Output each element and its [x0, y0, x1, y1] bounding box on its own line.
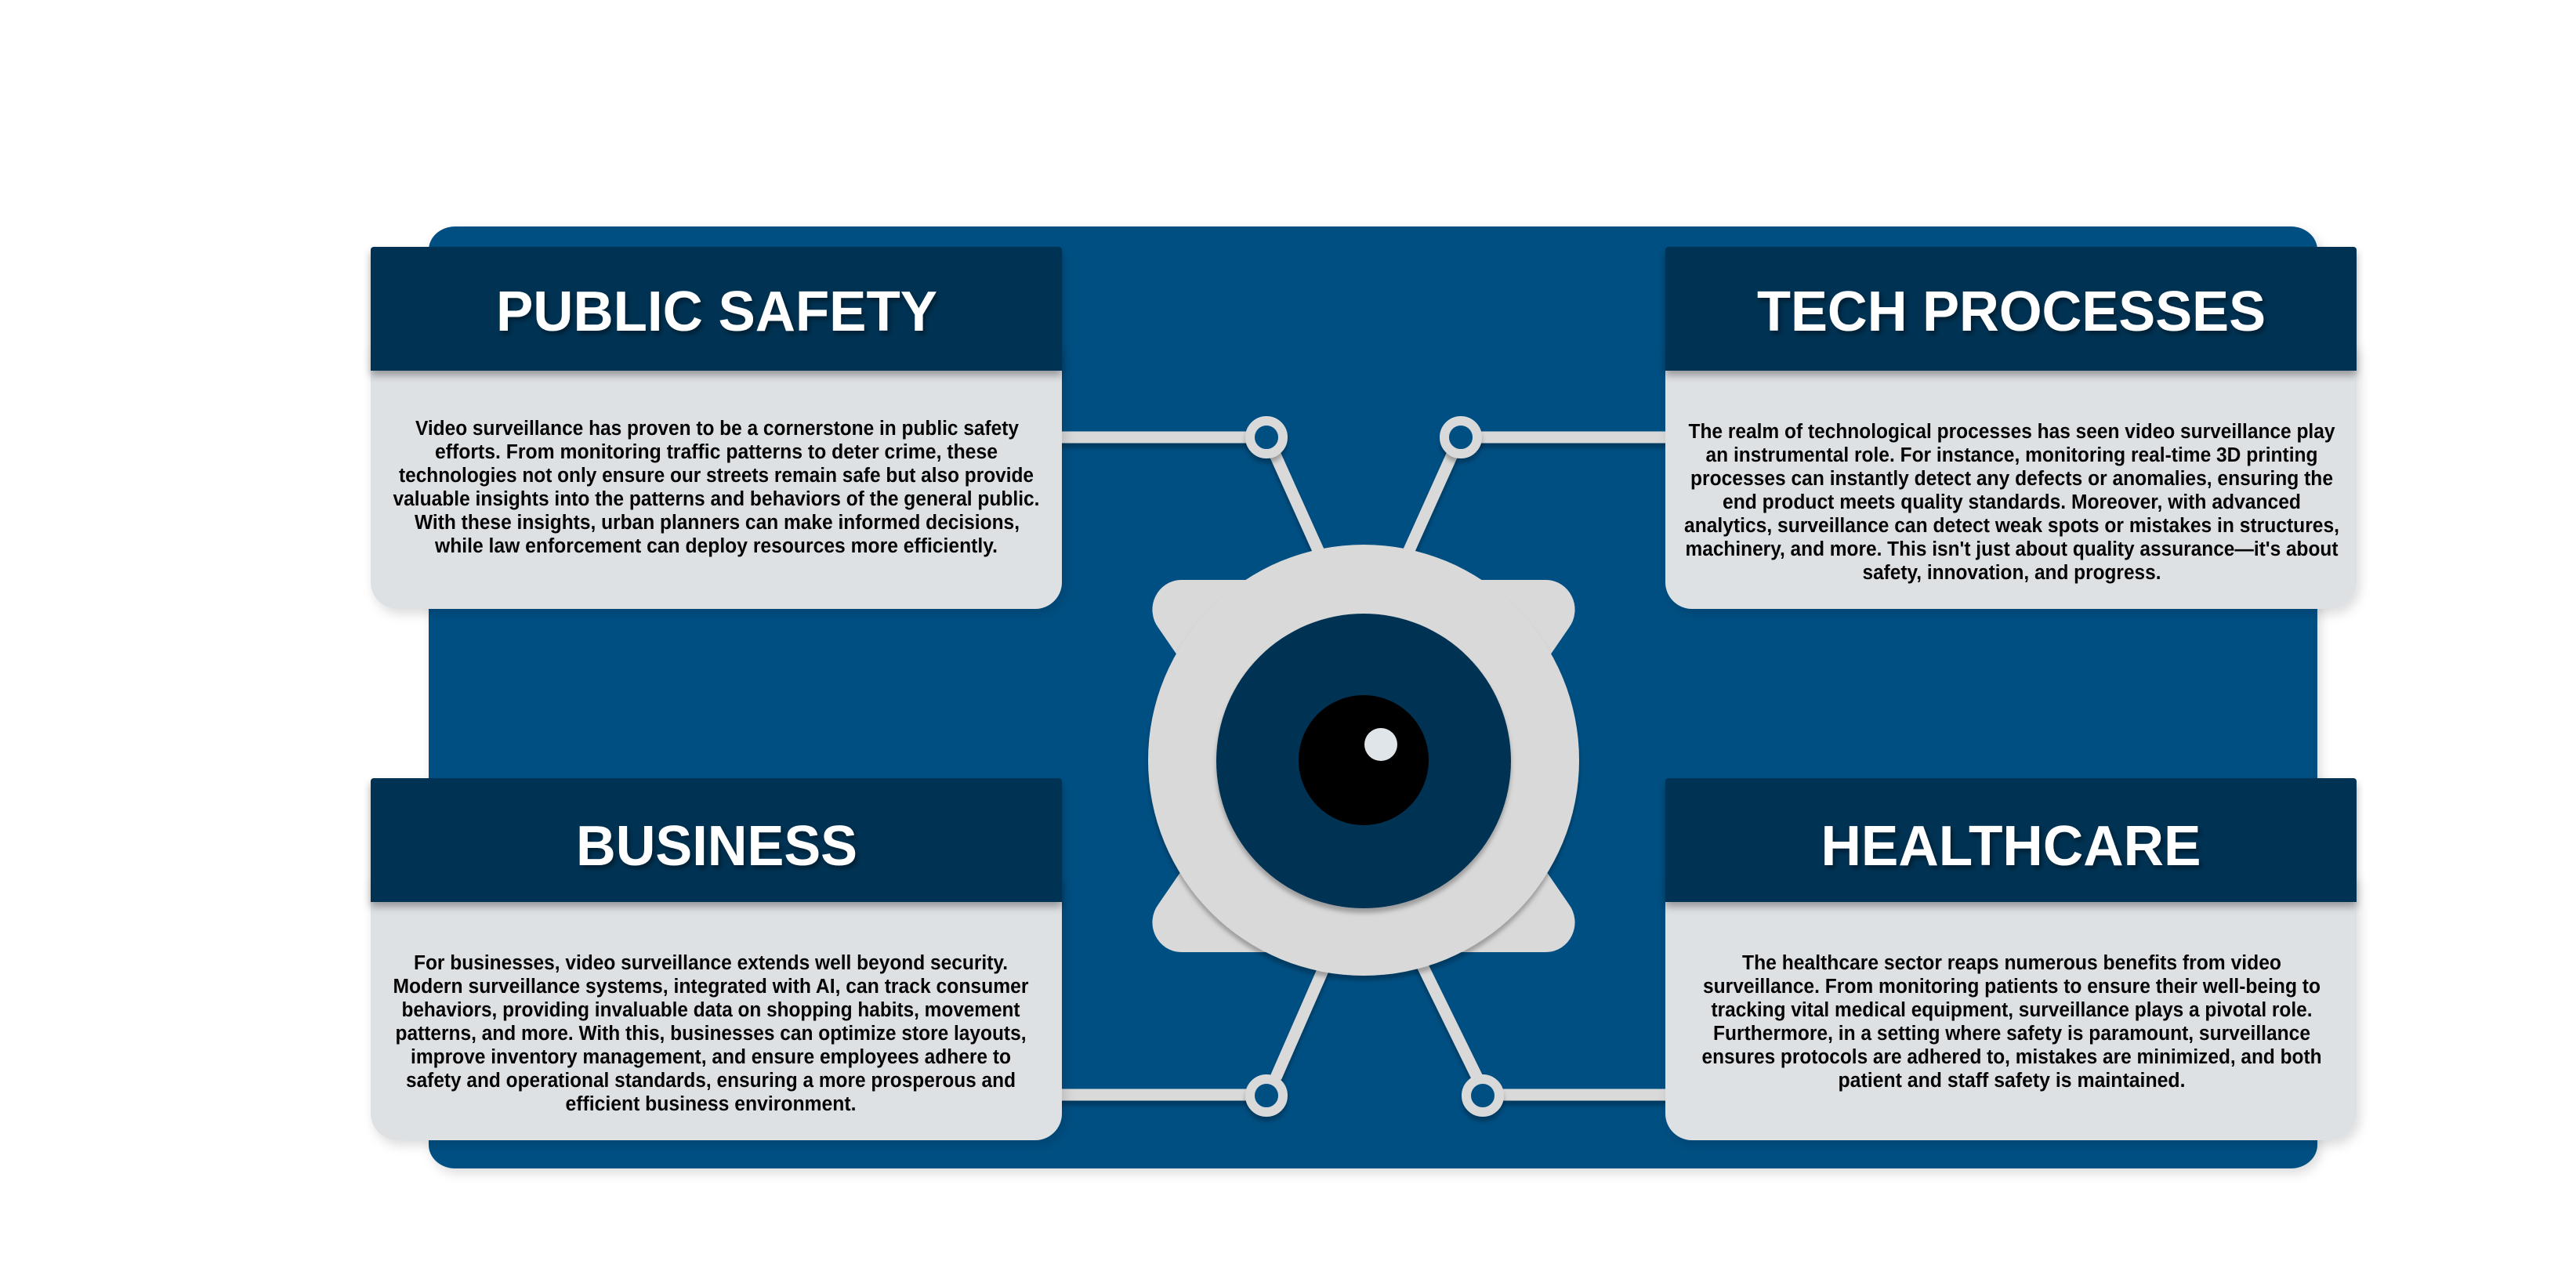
body text: [393, 418, 1039, 557]
camera mount bottom: [1152, 854, 1575, 952]
connector lines: [1050, 437, 1677, 1095]
camera highlight: [1364, 728, 1397, 761]
body text: efforts. From monitoring traffic patterns to deter crime, these: [435, 441, 998, 463]
body text: For businesses, video surveillance extends well beyond security.: [414, 952, 1008, 974]
body text: Video surveillance has proven to be a cornerstone in public safety: [415, 418, 1020, 440]
heading: BUSINESS: [576, 815, 857, 878]
connector node: bottom right: [1466, 1079, 1499, 1112]
header band: [371, 778, 1062, 902]
body text: behaviors, providing invaluable data on shopping habits, movement: [401, 999, 1020, 1021]
body text: valuable insights into the patterns and behaviors of the general public.: [393, 488, 1039, 510]
body text: efficient business environment.: [566, 1093, 856, 1115]
body text: Modern surveillance systems, integrated with AI, can track consumer: [393, 976, 1029, 998]
body text: ensures protocols are adhered to, mistakes are minimized, and both: [1702, 1046, 2321, 1068]
body text: [1702, 952, 2321, 1092]
body text: The realm of technological processes has seen video surveillance play: [1688, 421, 2335, 443]
body text: processes can instantly detect any defects or anomalies, ensuring the: [1690, 468, 2333, 490]
body text: [393, 952, 1029, 1115]
body text: With these insights, urban planners can make informed decisions,: [415, 512, 1020, 534]
body text: while law enforcement can deploy resources more efficiently.: [434, 535, 998, 557]
camera outer ring: [1148, 545, 1579, 976]
body text: end product meets quality standards. Moreover, with advanced: [1723, 491, 2301, 513]
body text: The healthcare sector reaps numerous benefits from video: [1742, 952, 2281, 974]
header band: [1665, 247, 2357, 371]
heading: PUBLIC SAFETY: [496, 281, 937, 343]
body text: machinery, and more. This isn't just about quality assurance—it's about: [1685, 538, 2339, 560]
body text: patterns, and more. With this, businesses can optimize store layouts,: [395, 1023, 1027, 1045]
card body: [1665, 876, 2357, 1140]
body text: Furthermore, in a setting where safety is paramount, surveillance: [1713, 1023, 2310, 1045]
camera pupil: [1299, 695, 1429, 825]
body text: analytics, surveillance can detect weak spots or mistakes in structures,: [1684, 515, 2339, 537]
panel: tech processes: [1665, 247, 2357, 609]
connector node: top left: [1250, 421, 1283, 454]
body text: [1684, 421, 2339, 584]
body text: technologies not only ensure our streets remain safe but also provide: [399, 465, 1034, 487]
camera mount top: [1152, 580, 1575, 678]
card body: [371, 876, 1062, 1140]
panel: public safety: [371, 247, 1062, 609]
card body: [1665, 345, 2357, 609]
card body: [371, 345, 1062, 609]
connector node: bottom left: [1250, 1079, 1283, 1112]
heading: TECH PROCESSES: [1757, 281, 2266, 343]
panel: business: [371, 778, 1062, 1140]
body text: improve inventory management, and ensure employees adhere to: [411, 1046, 1011, 1068]
connector node: top right: [1444, 421, 1477, 454]
body text: safety and operational standards, ensuring a more prosperous and: [406, 1070, 1016, 1092]
header band: [371, 247, 1062, 371]
icon: surveillance camera eye: [1148, 545, 1579, 976]
background panel: [429, 226, 2317, 1168]
body text: tracking vital medical equipment, surveillance plays a pivotal role.: [1712, 999, 2312, 1021]
body text: an instrumental role. For instance, monitoring real-time 3D printing: [1705, 444, 2318, 466]
body text: safety, innovation, and progress.: [1862, 562, 2161, 584]
body text: surveillance. From monitoring patients to ensure their well-being to: [1703, 976, 2321, 998]
panel: healthcare: [1665, 778, 2357, 1140]
header band: [1665, 778, 2357, 902]
heading: HEALTHCARE: [1821, 815, 2201, 878]
camera iris: [1216, 614, 1511, 908]
body text: patient and staff safety is maintained.: [1839, 1070, 2185, 1092]
